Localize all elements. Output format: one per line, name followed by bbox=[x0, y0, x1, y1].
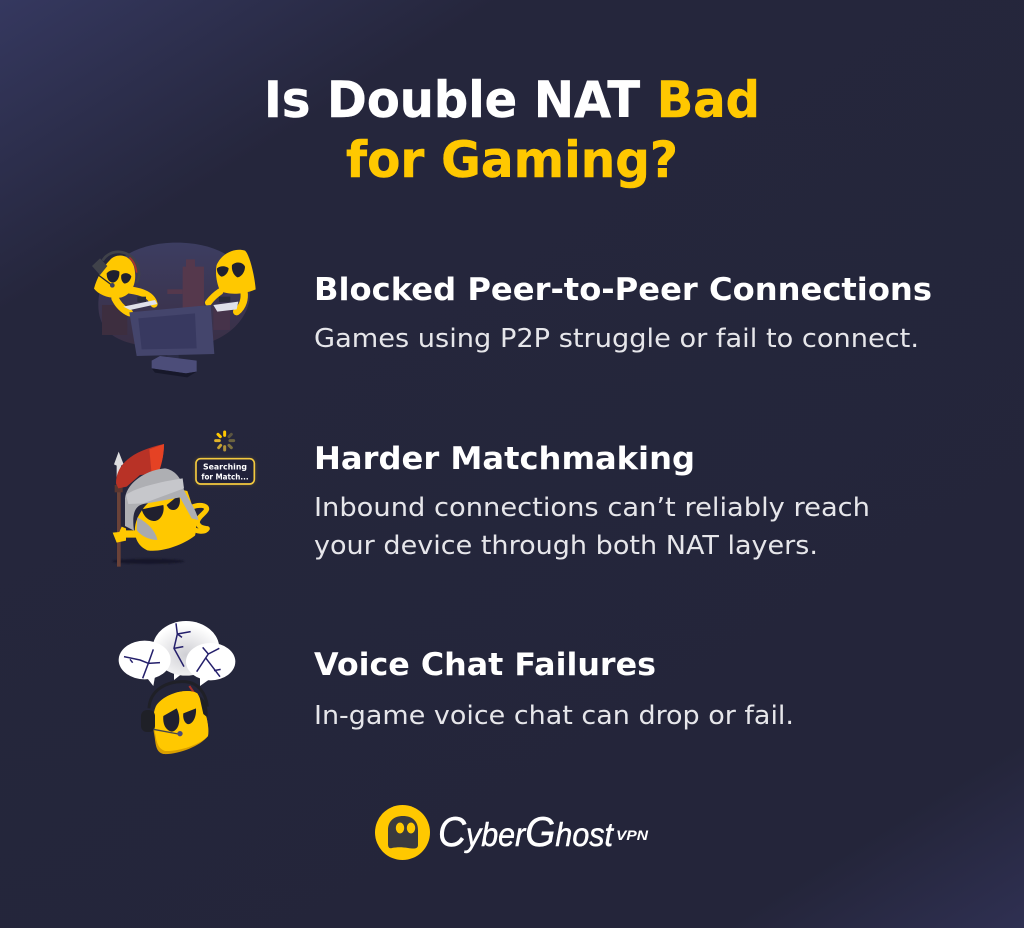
loading spinner bbox=[216, 432, 234, 450]
monitor bbox=[129, 305, 214, 377]
searching label bbox=[196, 459, 254, 484]
ghost body bbox=[135, 490, 196, 551]
spear bbox=[117, 475, 121, 567]
ghost body bbox=[153, 691, 208, 754]
right gamer bbox=[208, 250, 256, 312]
text: description 1: Games using P2P struggle or fail to connect. bbox=[314, 324, 919, 354]
heading 3: Voice Chat Failures bbox=[314, 647, 656, 683]
icon: spartan ghost searching for match: for Match... bbox=[201, 472, 249, 481]
logo: CyberGhost VPN: VPN bbox=[616, 827, 649, 843]
left gamer bbox=[92, 252, 157, 313]
icon: two gamers at a monitor bbox=[92, 243, 256, 377]
backdrop city blob bbox=[98, 243, 250, 347]
logo: CyberGhost VPN: CyberGhost bbox=[438, 808, 615, 855]
heading 2: Harder Matchmaking bbox=[314, 441, 695, 477]
crest bbox=[116, 444, 164, 488]
shadow bbox=[112, 559, 184, 564]
spear tip bbox=[114, 452, 124, 485]
title bbox=[264, 71, 760, 189]
title: for Gaming? bbox=[346, 131, 678, 189]
left bubble bbox=[119, 641, 171, 686]
helmet bbox=[125, 468, 198, 531]
eyes bbox=[163, 708, 179, 732]
headset band bbox=[149, 682, 207, 708]
hand bbox=[113, 527, 126, 543]
eyes bbox=[142, 505, 164, 521]
text: description 2: your device through both NAT layers. bbox=[314, 531, 818, 561]
heading 1: Blocked Peer-to-Peer Connections bbox=[314, 272, 932, 308]
text: description 2 bbox=[314, 493, 870, 561]
ghost arms bbox=[192, 505, 207, 531]
icon: spartan ghost searching for match bbox=[112, 432, 254, 567]
icon: spartan ghost searching for match: Searching bbox=[203, 462, 247, 471]
text: description 2: Inbound connections can’t reliably reach bbox=[314, 493, 870, 523]
title: Is Double NAT Bad bbox=[264, 71, 760, 129]
icon: ghost with cracked speech bubbles bbox=[119, 621, 235, 754]
center bubble bbox=[153, 621, 219, 680]
logo: CyberGhost VPN bbox=[375, 805, 649, 860]
cracks bbox=[124, 623, 221, 678]
right bubble bbox=[186, 643, 235, 686]
text: description 3: In-game voice chat can drop or fail. bbox=[314, 701, 794, 731]
headset bbox=[141, 710, 155, 732]
icon: ghost badge bbox=[375, 805, 430, 860]
